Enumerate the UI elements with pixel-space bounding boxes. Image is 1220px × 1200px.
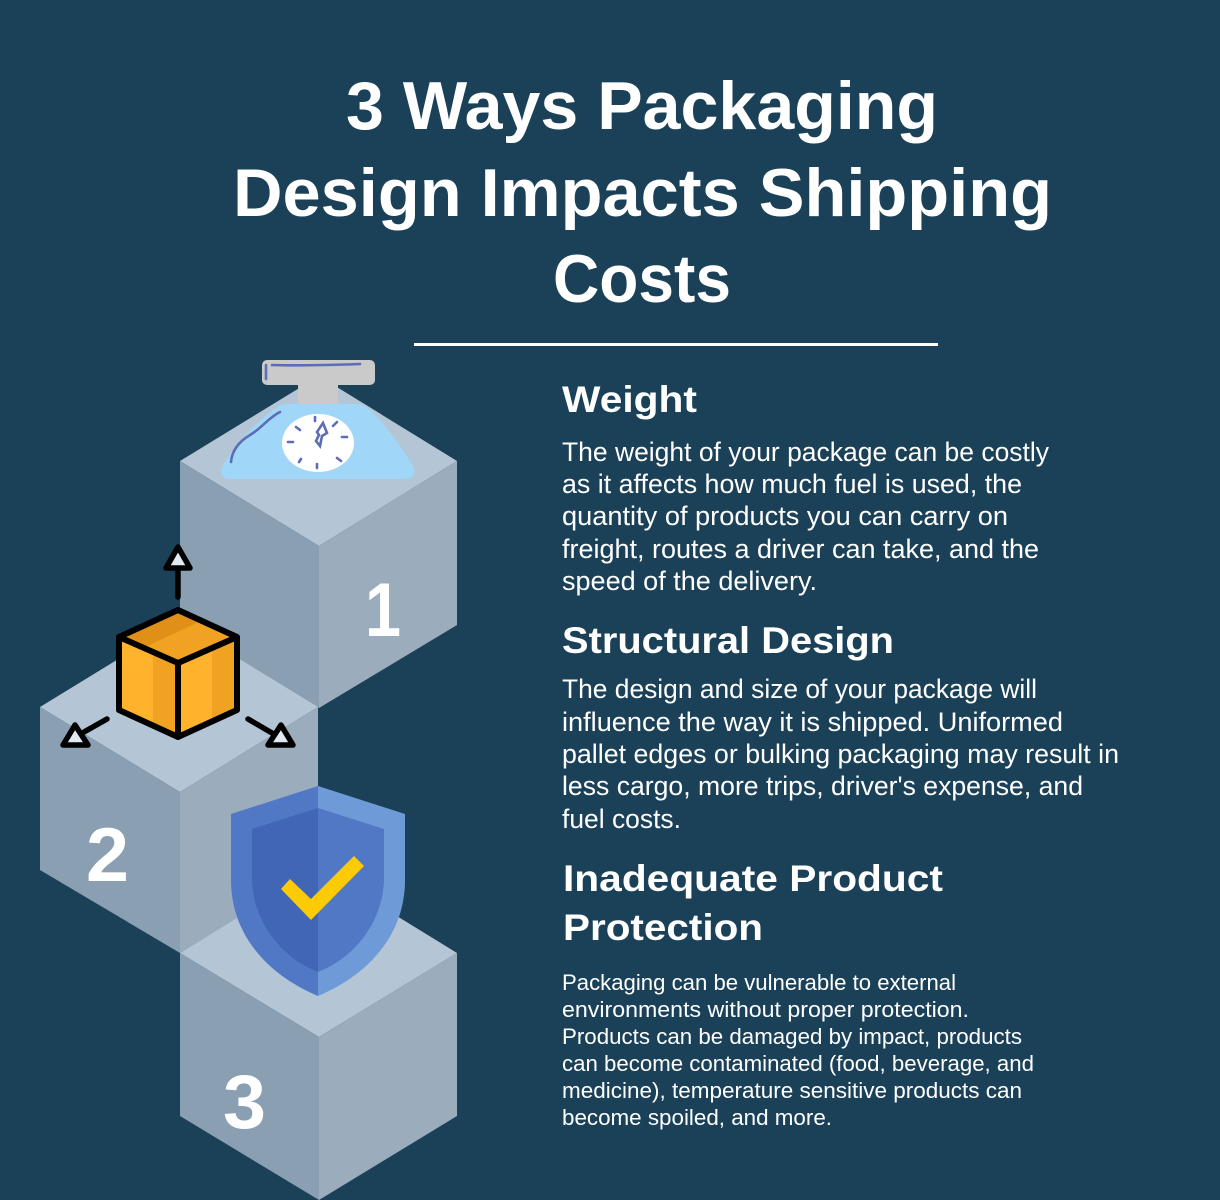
text: protection body: Packaging can be vulnerable to external: [562, 970, 956, 995]
text: protection body: medicine), temperature sensitive products can: [562, 1078, 1022, 1103]
text: weight body: freight, routes a driver can take, and the: [562, 534, 1039, 564]
text: protection body: become spoiled, and more.: [562, 1105, 832, 1130]
text: structural design body: influence the way it is shipped. Uniformed: [562, 707, 1063, 737]
text: weight body: speed of the delivery.: [562, 566, 817, 596]
heading: inadequate product protection: [563, 858, 943, 948]
text: weight body: quantity of products you can carry on: [562, 501, 1008, 531]
title: Costs: [553, 241, 731, 317]
title: [233, 68, 1052, 317]
icon: box with arrows: [63, 547, 293, 745]
section: structural design: [562, 620, 1119, 834]
arrow: right: [248, 719, 293, 745]
block 1: [180, 376, 457, 708]
heading: inadequate product protection: Protection: [563, 907, 763, 948]
text: structural design body: less cargo, more trips, driver's expense, and: [562, 771, 1083, 801]
text: structural design body: The design and size of your package will: [562, 674, 1037, 704]
number 2: 2: [86, 813, 129, 898]
text: protection body: can become contaminated (food, beverage, and: [562, 1051, 1034, 1076]
block 3: [180, 868, 457, 1200]
arrow: up: [166, 547, 190, 597]
text: structural design body: [562, 674, 1119, 834]
heading: inadequate product protection: Inadequate Product: [563, 858, 943, 899]
title: Design Impacts Shipping: [233, 155, 1052, 231]
text: protection body: environments without proper protection.: [562, 997, 969, 1022]
arrow: left: [63, 719, 107, 745]
heading: weight: Weight: [562, 379, 697, 420]
text: weight body: as it affects how much fuel is used, the: [562, 469, 1022, 499]
number 3: 3: [223, 1060, 266, 1145]
block 2: [40, 622, 318, 953]
text: protection body: [562, 970, 1034, 1130]
heading: structural design: Structural Design: [562, 620, 894, 661]
text: weight body: [562, 437, 1049, 596]
section: weight: [562, 379, 1049, 596]
text: structural design body: fuel costs.: [562, 804, 681, 834]
icon: shield with check: [231, 786, 405, 996]
text: structural design body: pallet edges or bulking packaging may result in: [562, 739, 1119, 769]
title: 3 Ways Packaging: [346, 68, 938, 144]
section: inadequate product protection: [562, 858, 1034, 1130]
number 1: 1: [365, 568, 401, 653]
text: protection body: Products can be damaged by impact, products: [562, 1024, 1022, 1049]
text: weight body: The weight of your package can be costly: [562, 437, 1049, 467]
icon: weighing scale: [221, 360, 415, 479]
